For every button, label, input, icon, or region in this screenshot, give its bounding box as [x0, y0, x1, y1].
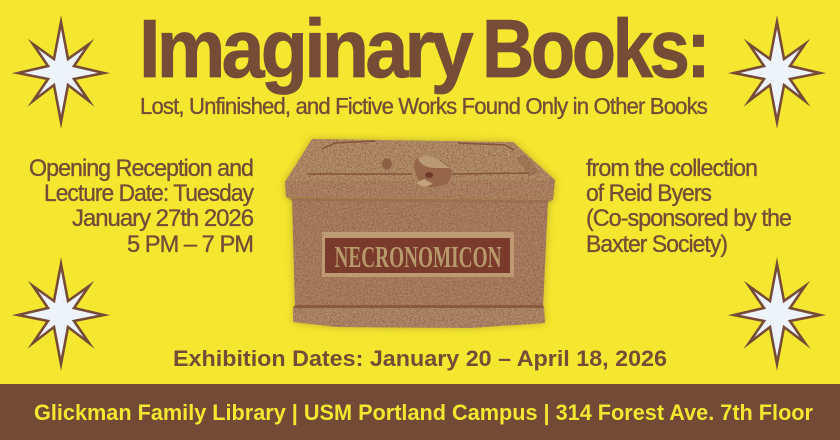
- icon: star top left: [18, 22, 104, 122]
- text block: collection credit: from the collection: [586, 155, 757, 182]
- text block: opening reception: 5 PM – 7 PM: [127, 231, 253, 258]
- box lid front edge: [285, 180, 555, 200]
- image: Necronomicon box: [285, 139, 555, 328]
- icon: star bottom left: [18, 264, 104, 364]
- icon: star top right: [734, 22, 820, 122]
- plate: [322, 232, 514, 277]
- text block: collection credit: (Co-sponsored by the: [586, 205, 792, 232]
- small knob: [382, 158, 392, 170]
- text block: opening reception: Opening Reception and: [29, 155, 253, 182]
- text block: collection credit: Baxter Society): [586, 231, 727, 258]
- text block: opening reception: Lecture Date: Tuesday: [44, 180, 254, 207]
- text block: collection credit: [586, 155, 792, 258]
- lock: [414, 156, 452, 187]
- text block: opening reception: January 27th 2026: [72, 205, 254, 232]
- box body: [292, 198, 548, 307]
- footer text: Glickman Family Library | USM Portland Campus | 314 Forest Ave. 7th Floor: [34, 400, 813, 425]
- icon: star bottom right: [734, 264, 820, 364]
- lid door lines: [307, 141, 529, 174]
- text block: opening reception: [29, 155, 254, 258]
- plate text: NECRONOMICON: [334, 239, 502, 274]
- lid shadow pitting: [516, 155, 540, 176]
- box base: [293, 307, 545, 328]
- exhibition dates: Exhibition Dates: January 20 – April 18, 2026: [173, 346, 667, 371]
- title: Books:: [482, 2, 707, 95]
- title: Imaginary: [139, 2, 474, 95]
- text block: collection credit: of Reid Byers: [586, 180, 712, 207]
- footer band: [0, 384, 840, 440]
- subtitle: Lost, Unfinished, and Fictive Works Found Only in Other Books: [140, 93, 707, 119]
- box lid top: [285, 139, 555, 182]
- title: [139, 2, 707, 95]
